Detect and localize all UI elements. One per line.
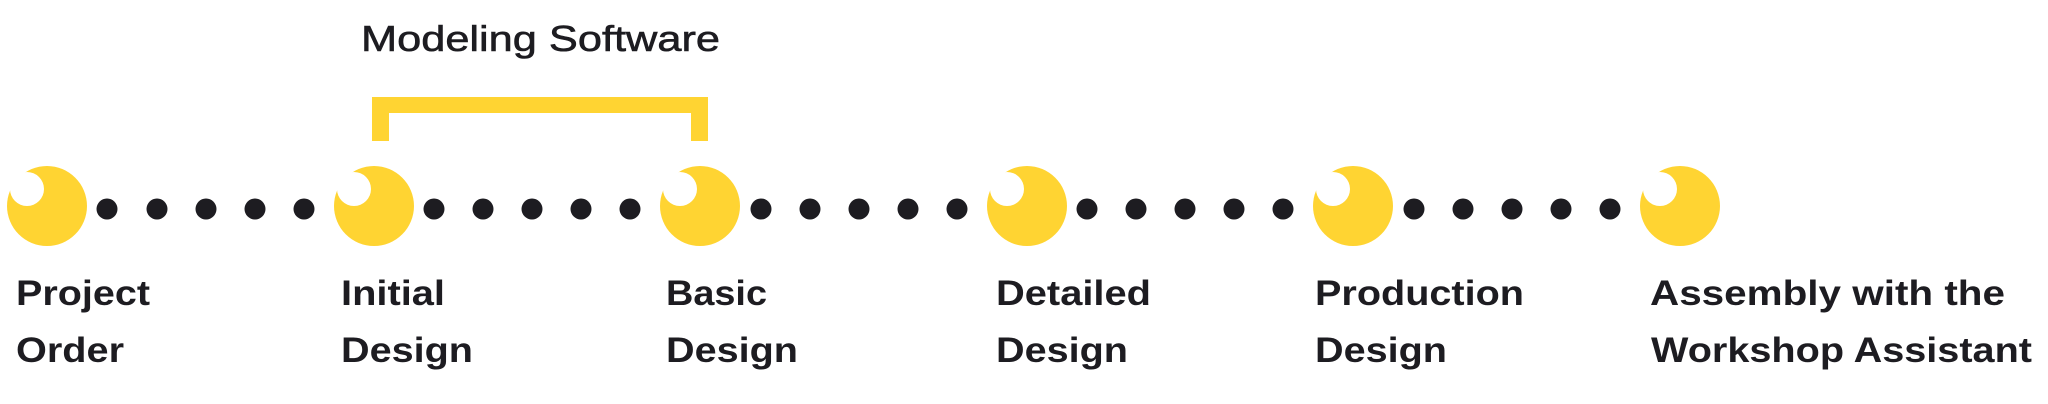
label: Initial Design: Design <box>341 331 473 370</box>
label: Assembly with the Workshop Assistant: Assembly with the <box>1650 274 2005 313</box>
node: initial design <box>334 166 414 246</box>
label: Production Design: Production <box>1315 274 1524 313</box>
dots 1 <box>96 198 314 220</box>
label: Basic Design: Basic <box>666 274 767 313</box>
node: production design <box>1313 166 1393 246</box>
label: Detailed Design <box>996 274 1151 370</box>
label: Detailed Design: Design <box>996 331 1128 370</box>
node: basic design <box>660 166 740 246</box>
label: Detailed Design: Detailed <box>996 274 1151 313</box>
node: assembly <box>1640 166 1720 246</box>
label: Assembly with the Workshop Assistant <box>1650 274 2032 370</box>
node: project order <box>7 166 87 246</box>
label: Production Design <box>1315 274 1524 370</box>
label: Basic Design: Design <box>666 331 798 370</box>
label: Project Order <box>16 274 150 370</box>
dots 5 <box>1404 198 1620 220</box>
label: Initial Design <box>341 274 473 370</box>
timeline <box>7 166 1720 246</box>
heading: Modeling Software: Modeling Software <box>361 18 720 59</box>
label: Project Order: Project <box>16 274 150 313</box>
label: Project Order: Order <box>16 331 124 370</box>
label: Initial Design: Initial <box>341 274 445 313</box>
label: Production Design: Design <box>1315 331 1447 370</box>
label: Basic Design <box>666 274 798 370</box>
node: detailed design <box>987 166 1067 246</box>
bracket: modeling software span <box>372 97 708 141</box>
dots 4 <box>1076 198 1294 220</box>
label: Assembly with the Workshop Assistant: Workshop Assistant <box>1651 331 2032 370</box>
dots 3 <box>750 198 968 220</box>
dots 2 <box>424 198 640 220</box>
